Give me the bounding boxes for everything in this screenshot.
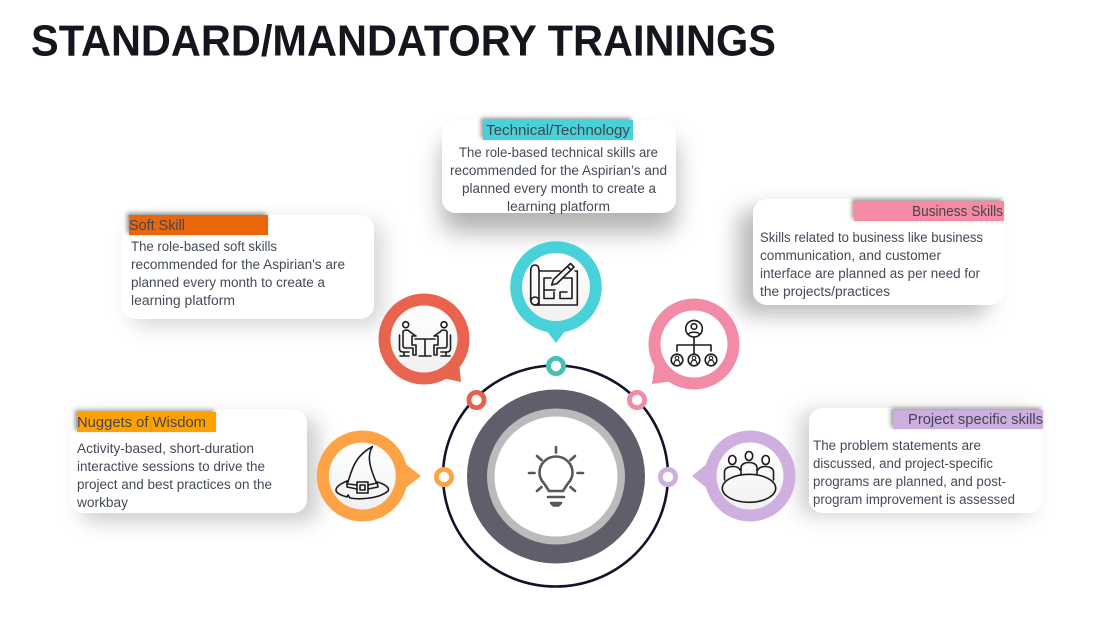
title: STANDARD/MANDATORY TRAININGS xyxy=(31,16,776,66)
panel: nuggets of wisdom xyxy=(70,409,307,513)
description: learning platform xyxy=(131,293,235,308)
description: Activity-based, short-duration xyxy=(77,441,254,456)
description xyxy=(76,441,272,510)
heading: Nuggets of Wisdom xyxy=(77,415,206,431)
icon: light bulb xyxy=(529,447,583,506)
panel: soft skill xyxy=(122,215,374,319)
icon: wizard hat xyxy=(336,446,388,499)
panel: project specific skills xyxy=(809,408,1043,513)
marker: teal xyxy=(548,358,564,374)
outer orbit ring xyxy=(443,366,668,586)
description: Skills related to business like business xyxy=(760,230,983,245)
description: the projects/practices xyxy=(760,284,890,299)
description: learning platform xyxy=(507,199,610,214)
description xyxy=(450,145,667,214)
card background xyxy=(122,215,374,319)
description: The problem statements are xyxy=(813,438,981,453)
card background xyxy=(753,199,1004,305)
pin centre xyxy=(329,442,396,510)
pin centre xyxy=(716,442,784,510)
heading: Technical/Technology xyxy=(486,123,631,139)
description xyxy=(813,438,1015,507)
icon: org chart xyxy=(671,320,717,366)
bubble: nuggets of wisdom xyxy=(317,430,421,522)
icon: people at table xyxy=(400,322,450,356)
pin body xyxy=(317,430,421,522)
description: interface are planned as per need for xyxy=(760,266,980,281)
description: planned every month to create a xyxy=(462,181,656,196)
light ring xyxy=(487,408,625,544)
card background xyxy=(70,409,307,513)
description xyxy=(131,239,345,308)
description: planned every month to create a xyxy=(131,275,325,290)
heading highlight xyxy=(483,120,633,140)
icon: meeting table xyxy=(722,452,776,502)
dark disc xyxy=(467,390,645,564)
heading: Business Skills xyxy=(912,204,1003,220)
heading highlight xyxy=(854,201,1004,221)
card background xyxy=(442,120,676,213)
white centre xyxy=(494,416,618,536)
marker: orange xyxy=(436,469,452,485)
description: communication, and customer xyxy=(760,248,941,263)
heading: Soft Skill xyxy=(129,218,185,234)
bubble: business skills xyxy=(648,298,740,390)
heading highlight xyxy=(77,412,216,432)
description: discussed, and project-specific xyxy=(813,456,993,471)
central hub xyxy=(443,366,668,586)
pin body xyxy=(692,430,796,522)
description xyxy=(760,230,983,299)
heading: Project specific skills xyxy=(908,412,1043,428)
panel: technical/technology xyxy=(442,120,676,214)
description: project and best practices on the xyxy=(77,477,272,492)
bubble: soft skill xyxy=(378,294,470,384)
heading highlight xyxy=(893,410,1043,429)
bubble: technical xyxy=(510,241,602,343)
panel: business skills xyxy=(753,199,1004,305)
pin body xyxy=(648,298,740,390)
bubble: project specific skills xyxy=(692,430,796,522)
marker: pink xyxy=(629,392,645,408)
pin body xyxy=(510,241,602,343)
card background xyxy=(809,408,1043,513)
description: interactive sessions to drive the xyxy=(77,459,265,474)
description: programs are planned, and post- xyxy=(813,474,1006,489)
description: workbay xyxy=(76,495,128,510)
heading highlight xyxy=(129,215,268,235)
description: program improvement is assessed xyxy=(813,492,1015,507)
pin centre xyxy=(522,253,590,321)
icon: blueprint and pencil xyxy=(531,264,577,305)
description: The role-based technical skills are xyxy=(459,145,658,160)
pin centre xyxy=(390,306,458,372)
description: recommended for the Aspirian's are xyxy=(131,257,345,272)
pin body xyxy=(378,294,470,384)
description: recommended for the Aspirian’s and xyxy=(450,163,667,178)
pin centre xyxy=(660,310,728,378)
marker: purple xyxy=(660,469,676,485)
description: The role-based soft skills xyxy=(131,239,277,254)
marker: red xyxy=(469,392,484,408)
